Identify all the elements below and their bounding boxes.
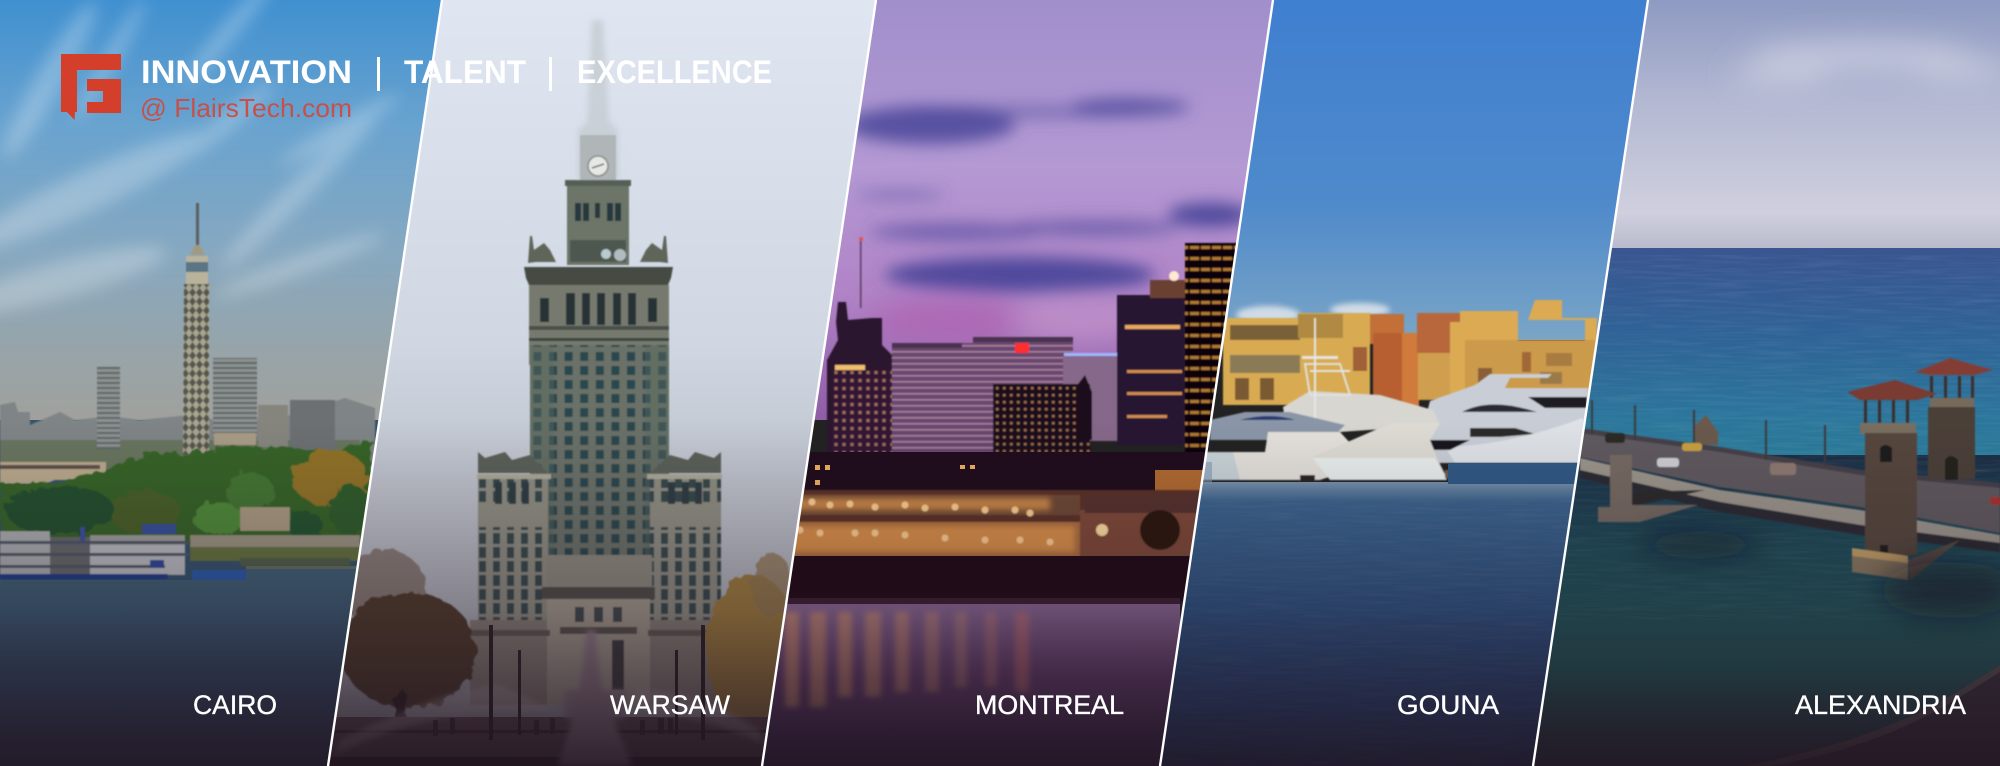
- clear sky: [1227, 0, 1647, 340]
- hazy sky: [1530, 0, 2000, 250]
- heading: tagline: TALENT: [404, 54, 526, 90]
- upper tier: [567, 180, 629, 265]
- label: Gouna: GOUNA: [1397, 690, 1499, 720]
- lamp posts: [489, 625, 705, 740]
- heading: tagline: INNOVATION: [141, 54, 352, 90]
- low building: [0, 462, 106, 484]
- Palace of Culture: [470, 20, 728, 705]
- cornice: [524, 267, 673, 285]
- label: Montreal: MONTREAL: [975, 690, 1124, 720]
- near water: [1530, 455, 2000, 766]
- side wings: [478, 475, 548, 625]
- dark quay: [788, 556, 1190, 600]
- central block and portico: [470, 620, 728, 705]
- sky: [0, 0, 450, 420]
- skyline: [827, 237, 1237, 465]
- yachts: [1200, 318, 1588, 483]
- distant clouds: [1236, 303, 1390, 324]
- small kiosk: [1695, 415, 1718, 445]
- river: [0, 580, 354, 596]
- cars: [1605, 433, 1625, 443]
- shadow under bridge: [1640, 531, 2000, 618]
- tower buildings: [97, 367, 120, 449]
- label: Warsaw: WARSAW: [610, 690, 730, 720]
- violet clouds: [845, 98, 1252, 293]
- sea ripples: [1530, 255, 2000, 475]
- foggy clock spire: [578, 20, 618, 180]
- foggy sky: [336, 0, 875, 717]
- water ripples: [1150, 500, 1660, 766]
- Stanley Bridge: [1580, 358, 2000, 580]
- main shaft: [529, 285, 669, 365]
- pier: [1598, 455, 1698, 522]
- panel: Cairo photo: [0, 0, 450, 766]
- panel: Alexandria photo: [1530, 0, 2000, 766]
- panel: Warsaw photo: [320, 0, 890, 766]
- pink glow: [870, 298, 1150, 342]
- fountain: [335, 630, 764, 766]
- crown ornaments: [528, 236, 668, 263]
- label: Alexandria: ALEXANDRIA: [1795, 690, 1966, 720]
- plaza: [330, 717, 768, 757]
- lit promenade: [794, 489, 1200, 556]
- rear tower: [1928, 407, 1975, 479]
- people: [433, 718, 673, 736]
- trees: [344, 548, 790, 717]
- dark low city: [804, 452, 1205, 490]
- Cairo Tower: [183, 203, 211, 455]
- city labels: [193, 690, 1966, 720]
- resort buildings: [1223, 300, 1597, 408]
- website address: @ FlairsTech.com: [140, 93, 352, 123]
- water reflections: [760, 604, 1180, 766]
- heading: tagline: [141, 54, 772, 91]
- soft clouds: [1730, 41, 2000, 85]
- hazy skyline: [0, 203, 375, 484]
- sea: [1530, 248, 2000, 458]
- panel: Montreal photo: [760, 0, 1280, 766]
- shore wall: [1745, 665, 2000, 766]
- lamp posts: [1591, 400, 1826, 465]
- cruise boat: [0, 524, 246, 581]
- villa and bank: [190, 507, 360, 566]
- label: Cairo: CAIRO: [193, 690, 277, 720]
- panel: Gouna photo: [1150, 0, 1660, 766]
- wispy clouds: [0, 0, 405, 326]
- twilight sky: [814, 0, 1272, 420]
- icon: FlairsTech logo: [61, 54, 121, 120]
- marina water: [1150, 482, 1660, 766]
- heading: tagline: EXCELLENCE: [577, 54, 772, 90]
- dark bottom gradient overlay: [0, 420, 2000, 766]
- panel dividers: [328, 0, 1648, 766]
- front tower: [1847, 380, 1937, 400]
- trees: [0, 440, 372, 545]
